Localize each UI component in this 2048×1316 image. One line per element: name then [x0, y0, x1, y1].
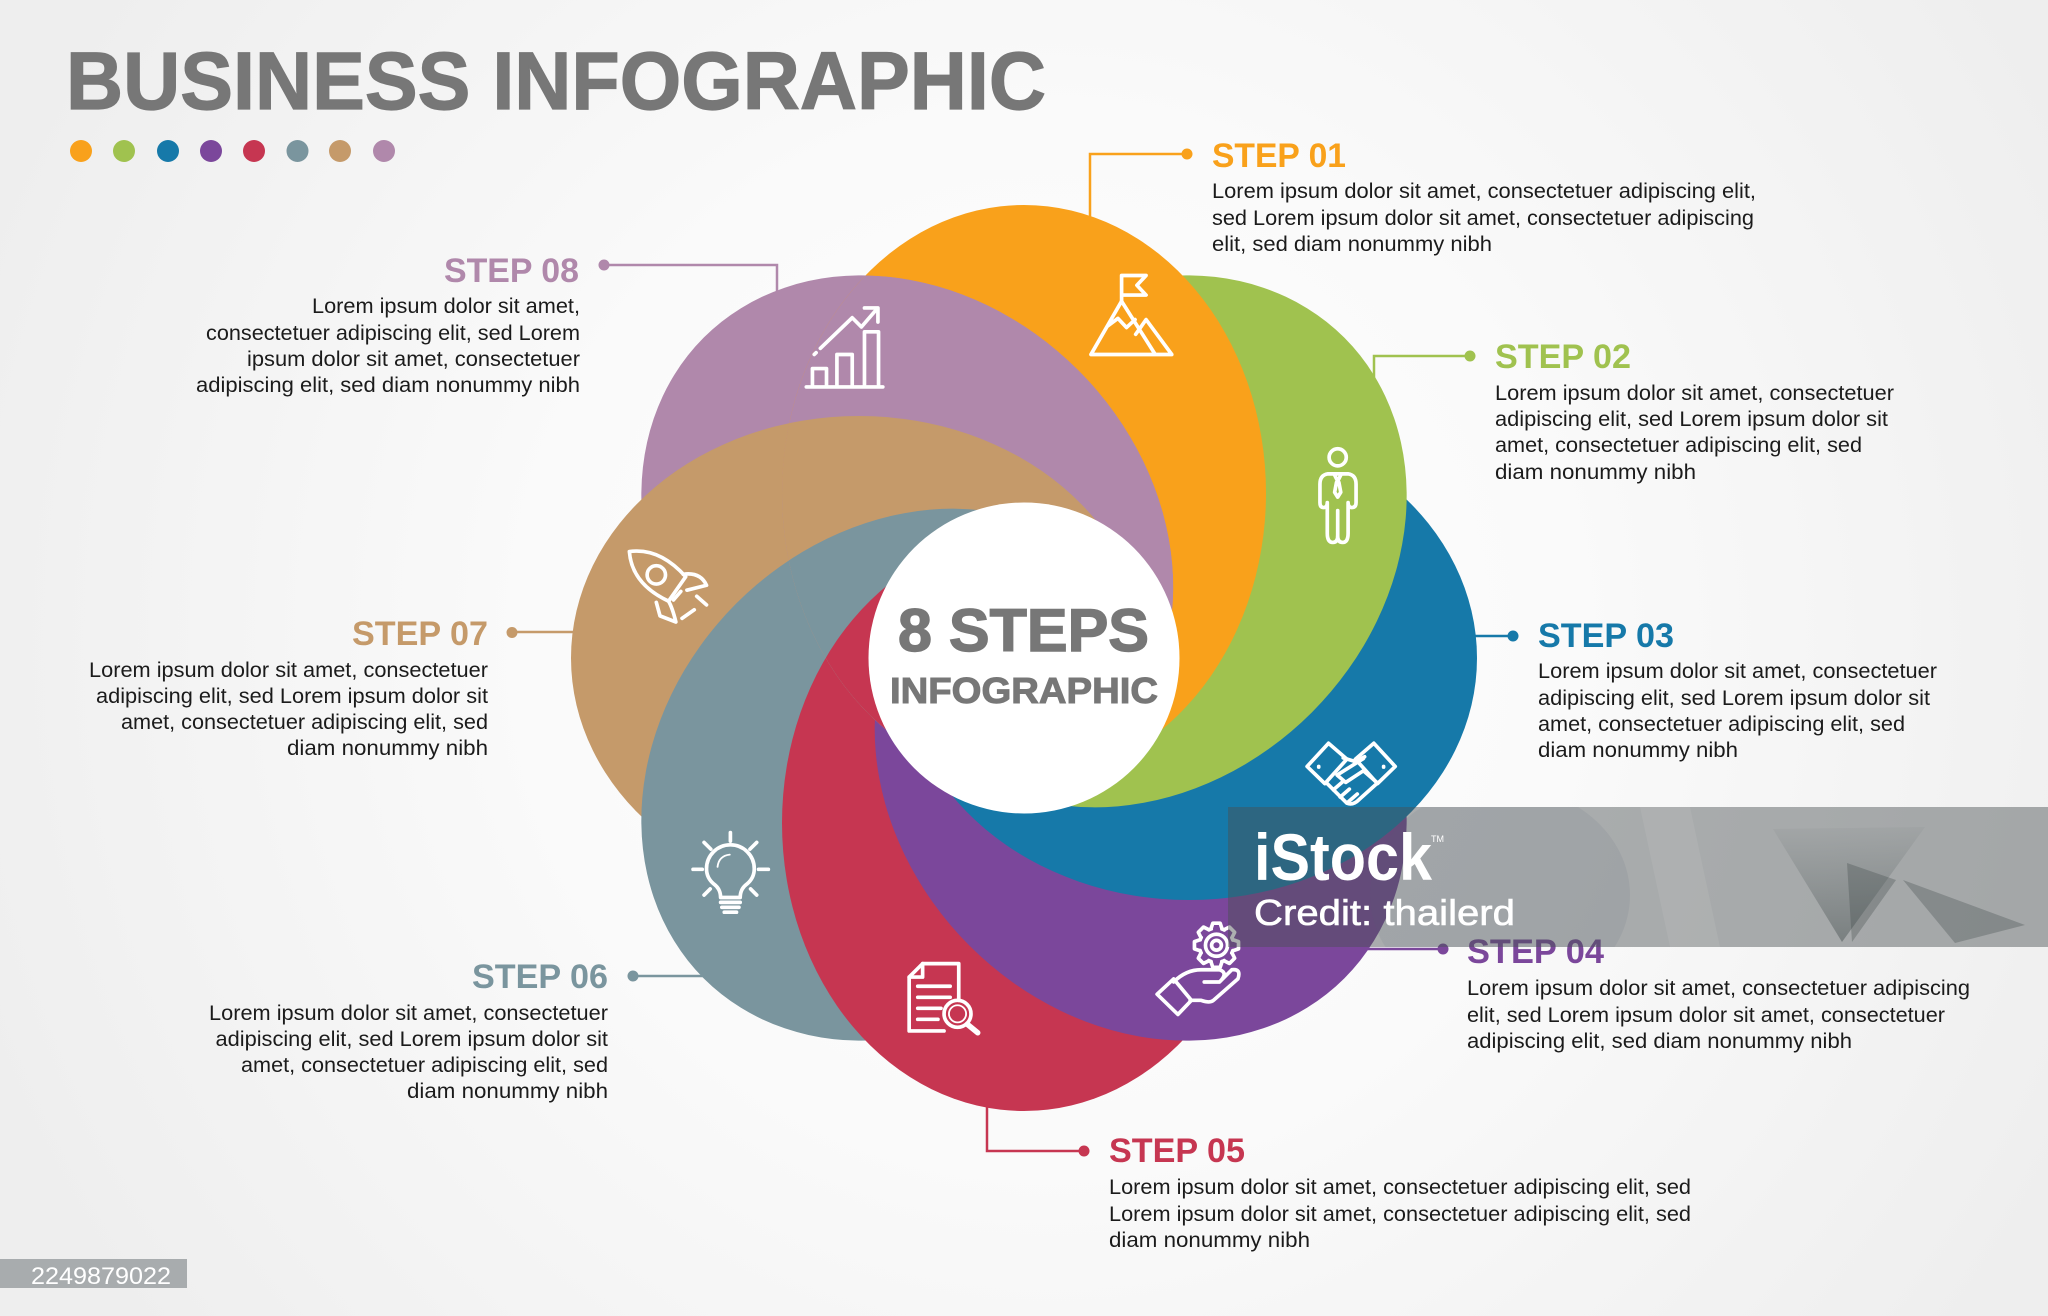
icon: handshake: [1307, 743, 1395, 804]
text: step 02 body: Lorem ipsum dolor sit amet, consectetuer: [1495, 381, 1894, 405]
image id badge: [0, 1259, 187, 1290]
callout: step 05: [1078, 1132, 1691, 1252]
icon: document with magnifier: [909, 964, 978, 1033]
text: step 03 body: amet, consectetuer adipiscing elit, sed: [1538, 712, 1905, 736]
text: step 02 body: amet, consectetuer adipiscing elit, sed: [1495, 433, 1862, 457]
text: step 06 body: amet, consectetuer adipiscing elit, sed: [241, 1053, 608, 1077]
heading: step 04: STEP 04: [1467, 933, 1604, 971]
text: step 05 body: [1109, 1175, 1691, 1252]
text: step 04 body: adipiscing elit, sed diam nonummy nibh: [1467, 1029, 1852, 1053]
text: step 07 body: Lorem ipsum dolor sit amet, consectetuer: [89, 658, 488, 682]
colour dots row: [70, 140, 395, 162]
text: step 05 body: Lorem ipsum dolor sit amet, consectetuer adipiscing elit, sed: [1109, 1175, 1691, 1199]
callout: step 06: [209, 958, 638, 1103]
text: step 07 body: diam nonummy nibh: [287, 736, 488, 760]
icon: rocket: [629, 551, 707, 622]
text: step 02 body: diam nonummy nibh: [1495, 460, 1696, 484]
text: step 08 body: adipiscing elit, sed diam nonummy nibh: [196, 373, 580, 397]
text: step 07 body: adipiscing elit, sed Lorem ipsum dolor sit: [96, 684, 488, 708]
text: step 08 body: Lorem ipsum dolor sit amet,: [312, 294, 580, 318]
text: step 03 body: adipiscing elit, sed Lorem ipsum dolor sit: [1538, 686, 1930, 710]
callout: step 03: [1508, 617, 1937, 762]
text: step 03 body: Lorem ipsum dolor sit amet, consectetuer: [1538, 659, 1937, 683]
petal overlap: mauve, tan, grey and red layered over orange to close the spiral: [782, 276, 1174, 730]
text: step 01 body: Lorem ipsum dolor sit amet, consectetuer adipiscing elit,: [1212, 179, 1756, 203]
center heading: 8 STEPS: [898, 597, 1149, 664]
heading: step 03: STEP 03: [1538, 617, 1674, 655]
petal: step 08 mauve: [533, 167, 1282, 916]
text: step 05 body: Lorem ipsum dolor sit amet, consectetuer adipiscing elit, sed: [1109, 1202, 1691, 1226]
text: step 06 body: diam nonummy nibh: [407, 1079, 608, 1103]
heading: step 05: STEP 05: [1109, 1132, 1245, 1170]
text: step 06 body: Lorem ipsum dolor sit amet, consectetuer: [209, 1001, 608, 1025]
watermark band: [1228, 807, 2048, 947]
leader lines: [512, 154, 1513, 1151]
title: BUSINESS INFOGRAPHIC: [66, 36, 1046, 127]
center circle: [868, 502, 1180, 814]
petal: step 03 blue: [901, 416, 1477, 900]
icon: growth chart: [806, 308, 883, 387]
watermark trademark: TM: [1431, 834, 1444, 844]
callout: step 04: [1438, 933, 1970, 1053]
text: step 01 body: elit, sed diam nonummy nibh: [1212, 232, 1492, 256]
text: step 01 body: [1212, 179, 1756, 256]
text: step 08 body: consectetuer adipiscing elit, sed Lorem: [206, 321, 580, 345]
callout: step 01: [1182, 137, 1756, 256]
icon: gear on hand: [1157, 923, 1239, 1014]
heading: step 07: STEP 07: [352, 615, 488, 653]
petal: step 02 green: [766, 167, 1515, 916]
petal: step 05 red: [782, 535, 1266, 1111]
text: step 06 body: adipiscing elit, sed Lorem ipsum dolor sit: [216, 1027, 608, 1051]
heading: step 06: STEP 06: [472, 958, 608, 996]
heading: step 08: STEP 08: [444, 252, 579, 290]
icon: light bulb: [693, 833, 768, 912]
petal: step 06 grey: [533, 400, 1282, 1149]
center subheading: INFOGRAPHIC: [890, 670, 1158, 711]
text: step 03 body: diam nonummy nibh: [1538, 738, 1738, 762]
text: step 08 body: [196, 294, 580, 397]
text: step 01 body: sed Lorem ipsum dolor sit amet, consectetuer adipiscing: [1212, 206, 1754, 230]
heading: step 02: STEP 02: [1495, 338, 1631, 376]
image id badge: 2249879022: [31, 1263, 171, 1290]
text: step 06 body: [209, 1001, 608, 1103]
text: step 05 body: diam nonummy nibh: [1109, 1228, 1310, 1252]
text: step 04 body: elit, sed Lorem ipsum dolor sit amet, consectetuer: [1467, 1003, 1945, 1027]
petal: step 01 orange: [782, 205, 1266, 781]
callout: step 02: [1464, 338, 1894, 484]
icon: flag on mountain: [1091, 276, 1172, 354]
text: step 08 body: ipsum dolor sit amet, consectetuer: [247, 347, 580, 371]
icon: businessman: [1320, 449, 1356, 542]
petal: step 07 tan: [571, 416, 1147, 900]
text: step 03 body: [1538, 659, 1937, 762]
callout: step 08: [196, 252, 610, 397]
watermark credit: Credit: thailerd: [1254, 892, 1515, 933]
watermark logo: iStock: [1254, 820, 1432, 894]
petal: step 04 purple: [766, 400, 1515, 1149]
text: step 04 body: [1467, 976, 1970, 1053]
text: step 02 body: adipiscing elit, sed Lorem ipsum dolor sit: [1495, 407, 1888, 431]
text: step 07 body: [89, 658, 488, 760]
text: step 07 body: amet, consectetuer adipiscing elit, sed: [121, 710, 488, 734]
callout: step 07: [89, 615, 518, 760]
text: step 02 body: [1495, 381, 1894, 484]
text: step 04 body: Lorem ipsum dolor sit amet, consectetuer adipiscing: [1467, 976, 1970, 1000]
petal icons: [629, 276, 1395, 1033]
heading: step 01: STEP 01: [1212, 137, 1346, 175]
